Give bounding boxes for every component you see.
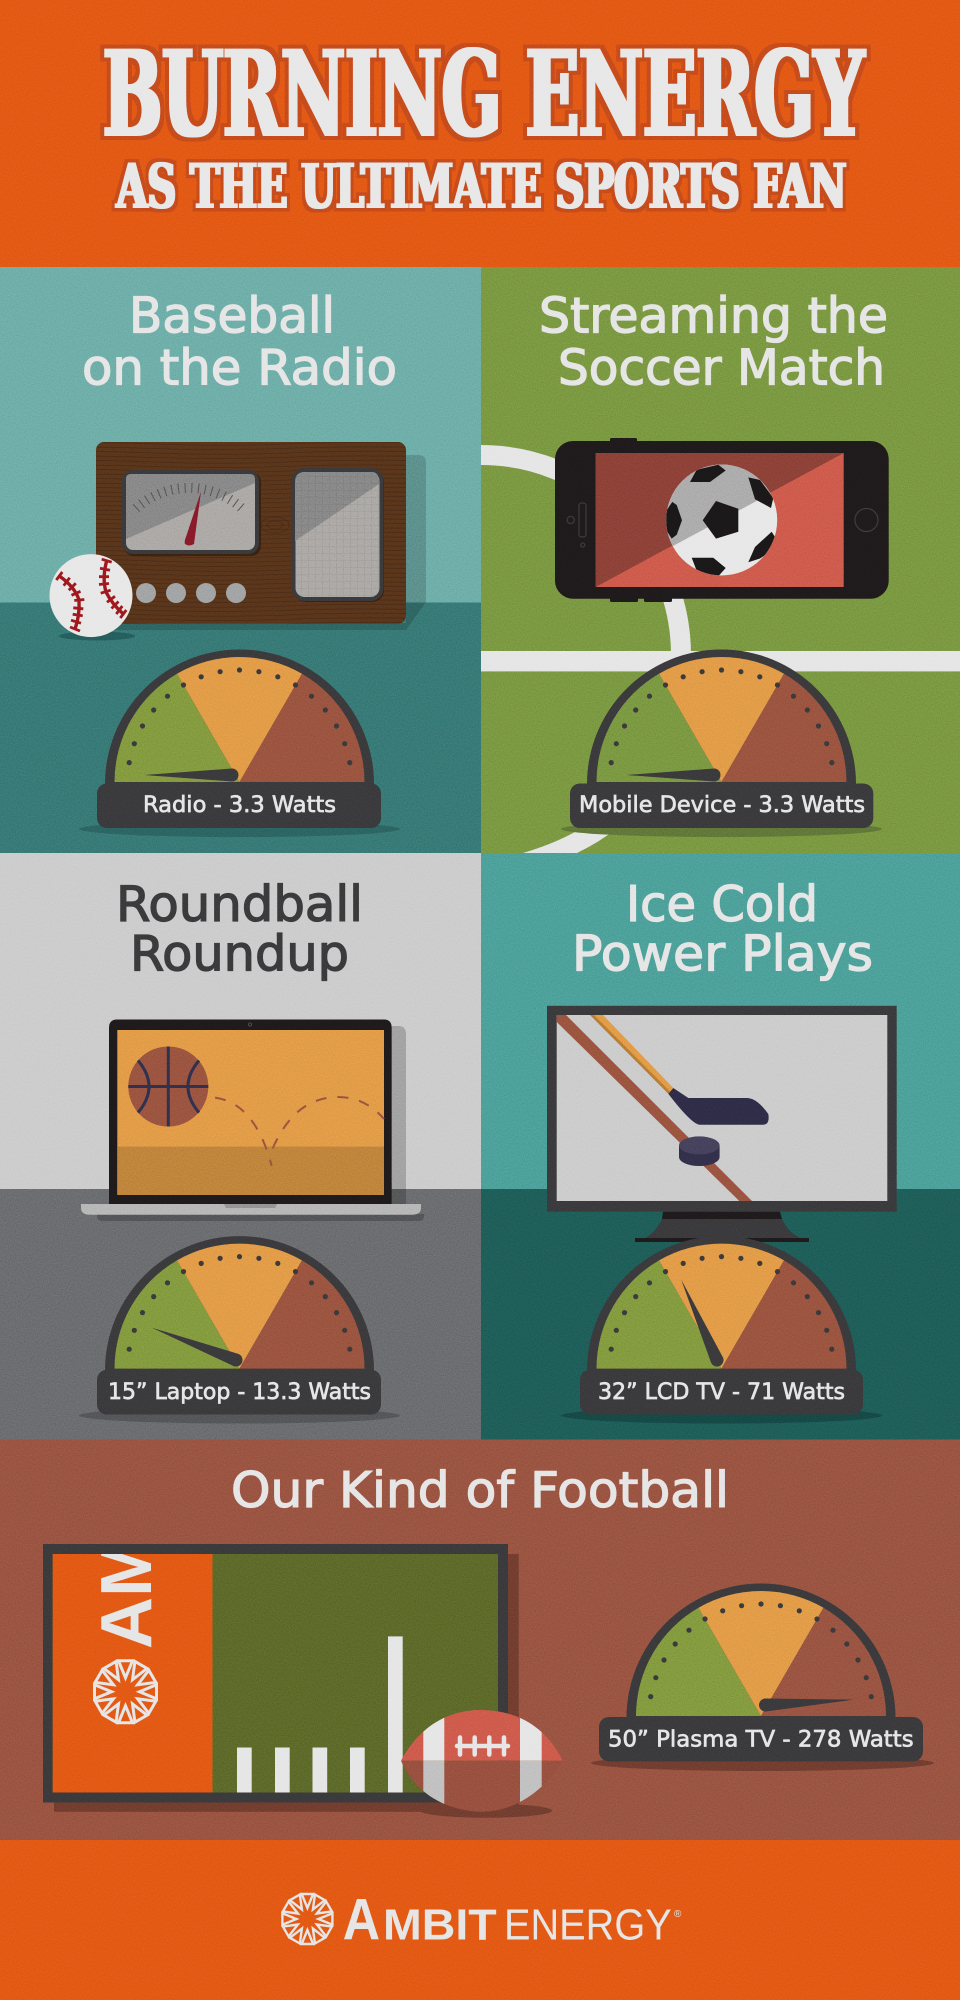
- yard line bars: [237, 1636, 403, 1792]
- radio dial: [124, 472, 261, 556]
- logo: ambit energy: [282, 1887, 682, 1952]
- gauge: plasma tv 278 watts: 50” Plasma TV - 278 Watts: [608, 1726, 914, 1752]
- panel: our kind of football: [0, 1421, 960, 1840]
- bounce path: [215, 1097, 384, 1166]
- heading: roundball roundup: Roundup: [130, 926, 349, 982]
- icon: football: [400, 1709, 564, 1818]
- end zone wordmark: AMBIT: [87, 1421, 167, 1649]
- heading: ice cold power plays: [572, 876, 873, 982]
- heading: baseball on the radio: Baseball: [129, 288, 335, 345]
- heading: roundball roundup: [116, 876, 363, 982]
- icon: laptop: [81, 1020, 424, 1221]
- needle: [150, 1322, 244, 1368]
- icon: wooden radio: [96, 442, 426, 630]
- panel: ice cold power plays: [481, 853, 960, 1440]
- heading: roundball roundup: Roundball: [116, 876, 363, 933]
- rink line: [557, 1015, 752, 1201]
- gauge: mobile device 3.3 watts: Mobile Device - 3.3 Watts: [579, 792, 865, 818]
- heading: baseball on the radio: on the Radio: [82, 339, 397, 396]
- panel: baseball on the radio: [0, 267, 481, 853]
- panel: roundball roundup: [0, 853, 481, 1440]
- wordmark: [343, 1887, 682, 1952]
- gauge: laptop 13.3 watts: 15” Laptop - 13.3 Watts: [108, 1379, 371, 1405]
- gauge: radio 3.3 watts: Radio - 3.3 Watts: [143, 792, 336, 818]
- heading: ice cold power plays: Ice Cold: [626, 876, 818, 933]
- wordmark: ENERGY: [504, 1900, 672, 1949]
- soccer ball: [666, 464, 778, 576]
- wordmark: ®: [674, 1909, 682, 1920]
- logo starburst: [282, 1894, 332, 1944]
- heading: our kind of football: Our Kind of Football: [231, 1462, 729, 1519]
- heading: baseball on the radio: [82, 288, 397, 396]
- header panel: [0, 0, 960, 267]
- wordmark: MBIT: [383, 1900, 497, 1949]
- icon: plasma tv with field: [43, 1544, 519, 1812]
- radio knobs: [136, 583, 246, 603]
- heading: streaming the soccer match: Streaming the: [539, 288, 888, 345]
- gauge: lcd tv 71 watts: 32” LCD TV - 71 Watts: [598, 1379, 845, 1405]
- heading: streaming the soccer match: [539, 288, 888, 396]
- needle: [144, 768, 238, 782]
- panel: streaming the soccer match: [481, 267, 960, 853]
- icon: smartphone: [555, 438, 889, 602]
- needle: [759, 1693, 854, 1712]
- icon: baseball: [50, 554, 135, 640]
- radio speaker: [294, 470, 384, 602]
- needle: [626, 768, 720, 782]
- gauge: lcd tv 71 watts: [561, 1236, 882, 1424]
- hockey puck: [679, 1136, 720, 1166]
- basketball: [128, 1046, 208, 1126]
- pitch lines: [481, 455, 960, 853]
- heading: streaming the soccer match: Soccer Match: [558, 339, 885, 396]
- gauge: radio 3.3 watts: [79, 650, 400, 837]
- footer panel: [0, 1840, 960, 2000]
- logo: end zone starburst: [94, 1661, 156, 1723]
- heading: ice cold power plays: Power Plays: [572, 926, 873, 982]
- gauge: plasma tv 278 watts: [591, 1584, 934, 1771]
- gauge: laptop 13.3 watts: [79, 1236, 400, 1424]
- needle: [675, 1277, 726, 1369]
- hockey stick: [590, 1015, 769, 1125]
- gauge: mobile device 3.3 watts: [561, 650, 882, 837]
- wordmark: A: [343, 1887, 380, 1952]
- icon: lcd tv: [547, 1006, 897, 1242]
